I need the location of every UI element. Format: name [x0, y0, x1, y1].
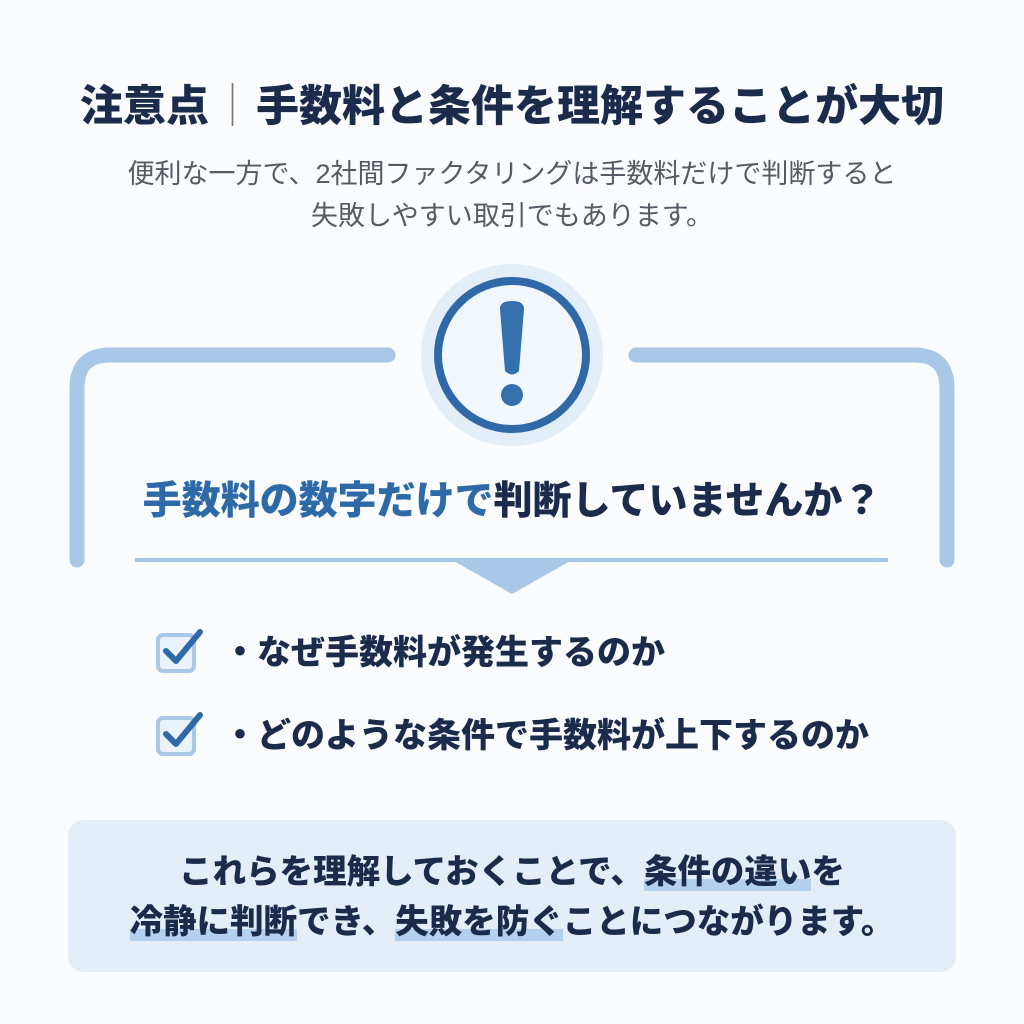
divider with pointer	[135, 560, 888, 594]
conclusion text: これらを理解しておくことで、条件の違いを	[179, 854, 845, 891]
subtitle: 失敗しやすい取引でもあります。	[311, 201, 713, 231]
conclusion text	[130, 854, 894, 941]
subtitle	[128, 159, 896, 231]
question: 手数料の数字だけで判断していませんか？	[143, 480, 881, 523]
title: 注意点｜手数料と条件を理解することが大切	[80, 83, 944, 131]
bracket frame	[70, 348, 954, 594]
icon: exclamation	[421, 264, 603, 446]
conclusion text: 冷静に判断でき、失敗を防ぐことにつながります。	[130, 904, 894, 941]
conclusion box	[68, 820, 956, 972]
checklist item 1: ・なぜ手数料が発生するのか	[223, 634, 665, 672]
checklist item 2: ・どのような条件で手数料が上下するのか	[223, 717, 869, 755]
subtitle: 便利な一方で、2社間ファクタリングは手数料だけで判断すると	[128, 159, 896, 189]
